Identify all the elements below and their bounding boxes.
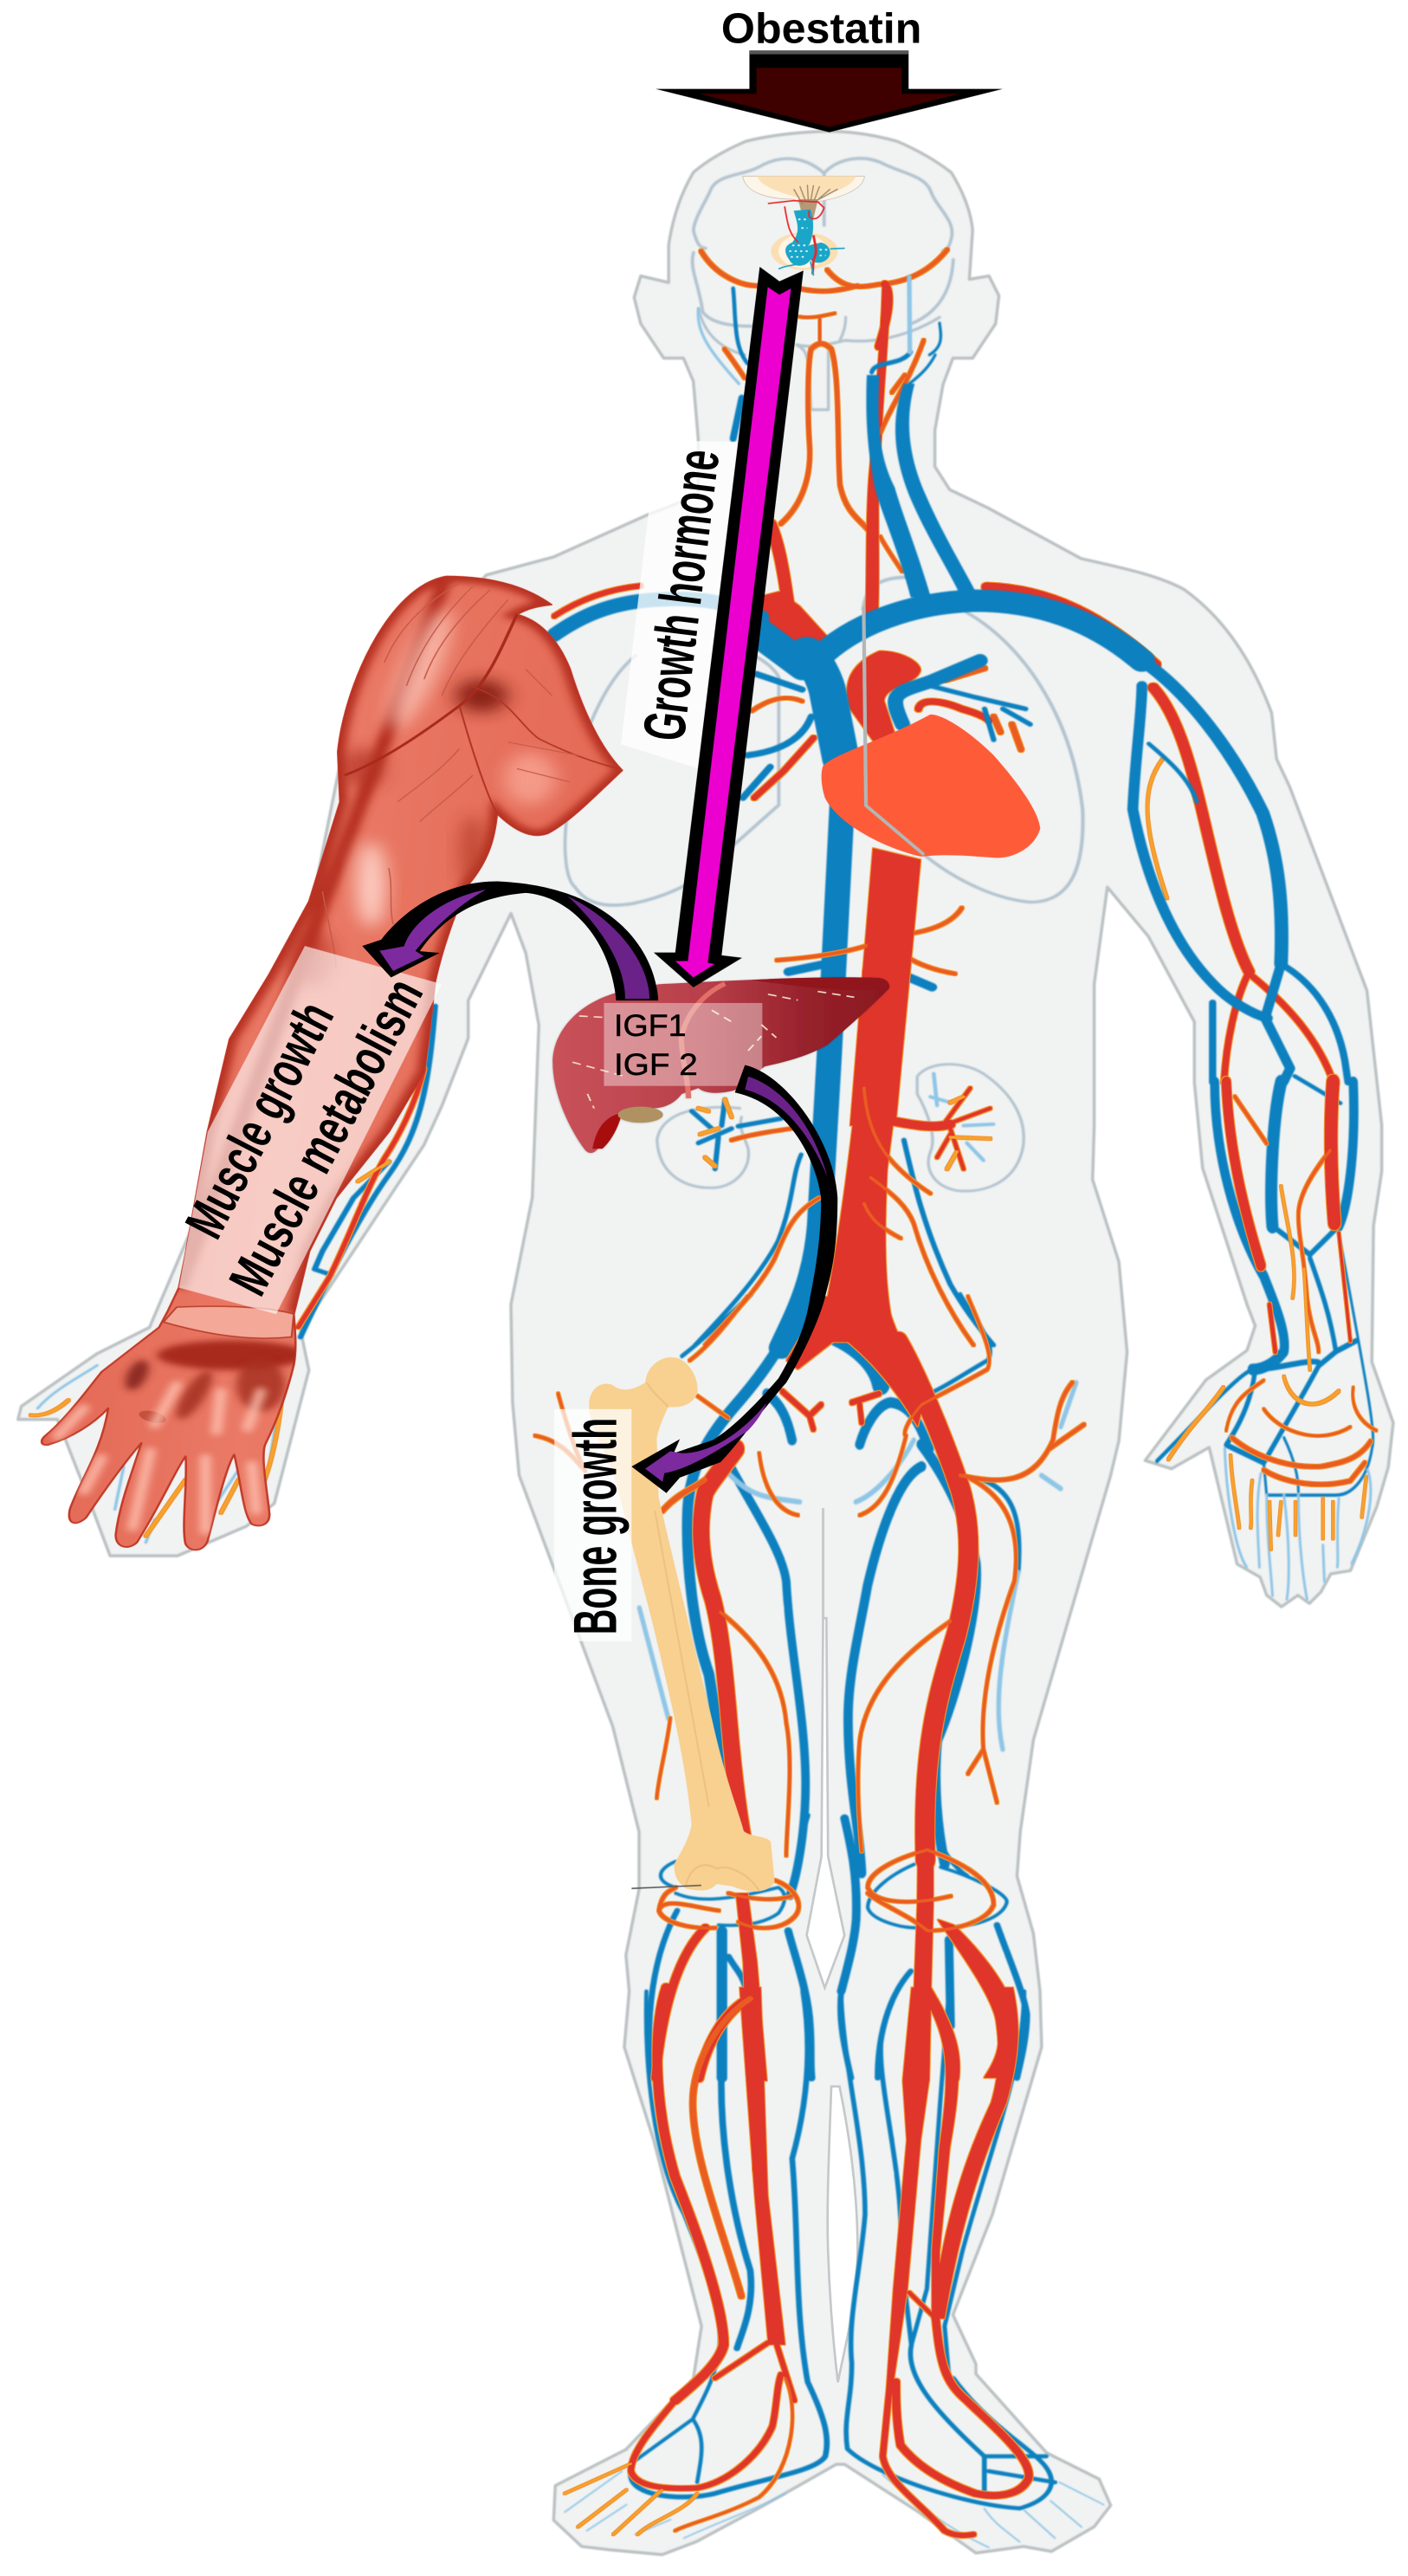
forearm label panel bbox=[179, 946, 442, 1314]
muscle fibres bbox=[322, 583, 578, 968]
label: IGF1: IGF1 bbox=[614, 1009, 687, 1043]
white label panel behind growth hormone bbox=[621, 440, 738, 772]
knee rings orange bbox=[659, 1850, 994, 1931]
kidneys bbox=[657, 1065, 1024, 1191]
descending aorta bbox=[850, 848, 920, 1126]
femur bone bbox=[589, 1357, 775, 1892]
heart pericardium line bbox=[863, 608, 923, 854]
limb and abdomen arteries bbox=[31, 848, 1376, 2535]
arrow: liver to muscle bbox=[362, 882, 658, 1000]
chest and neck arteries bbox=[554, 249, 1334, 1083]
label: Muscle growth: Muscle growth bbox=[174, 992, 346, 1247]
line between thighs bbox=[823, 1508, 824, 1618]
muscular arm bbox=[42, 577, 622, 1550]
muscle shading bbox=[57, 577, 622, 1531]
label: IGF 2: IGF 2 bbox=[614, 1048, 698, 1082]
arrow: growth hormone bbox=[654, 267, 804, 987]
pituitary gland inset bbox=[743, 176, 864, 275]
label: Growth hormone: Growth hormone bbox=[631, 446, 732, 744]
knee rings blue bbox=[661, 1861, 1007, 1928]
IGF label panel bbox=[604, 1003, 762, 1086]
white label panel behind bone growth bbox=[554, 1409, 631, 1641]
brain and face contour lines bbox=[565, 159, 1083, 1191]
label: Muscle metabolism: Muscle metabolism bbox=[217, 968, 435, 1304]
left lung bbox=[565, 654, 778, 905]
arrow: liver to bone bbox=[631, 1065, 837, 1493]
title: Obestatin: Obestatin bbox=[721, 4, 921, 52]
pin line bbox=[631, 1886, 701, 1888]
right lung bbox=[920, 612, 1083, 903]
label: Bone growth: Bone growth bbox=[560, 1418, 629, 1634]
gap between thighs bbox=[807, 1618, 844, 1988]
heart bbox=[822, 608, 1040, 858]
left forearm and hand veins bbox=[37, 1006, 436, 1543]
hand shading bbox=[157, 1340, 307, 1370]
left forearm and hand arteries bbox=[31, 1069, 424, 1536]
falciform ligament bbox=[681, 984, 725, 1098]
gallbladder bbox=[618, 1107, 663, 1123]
liver bbox=[552, 977, 889, 1153]
arrow: obestatin bbox=[656, 50, 1003, 133]
gap between calves bbox=[828, 2087, 857, 2382]
darker muscle edges bbox=[179, 577, 622, 1314]
